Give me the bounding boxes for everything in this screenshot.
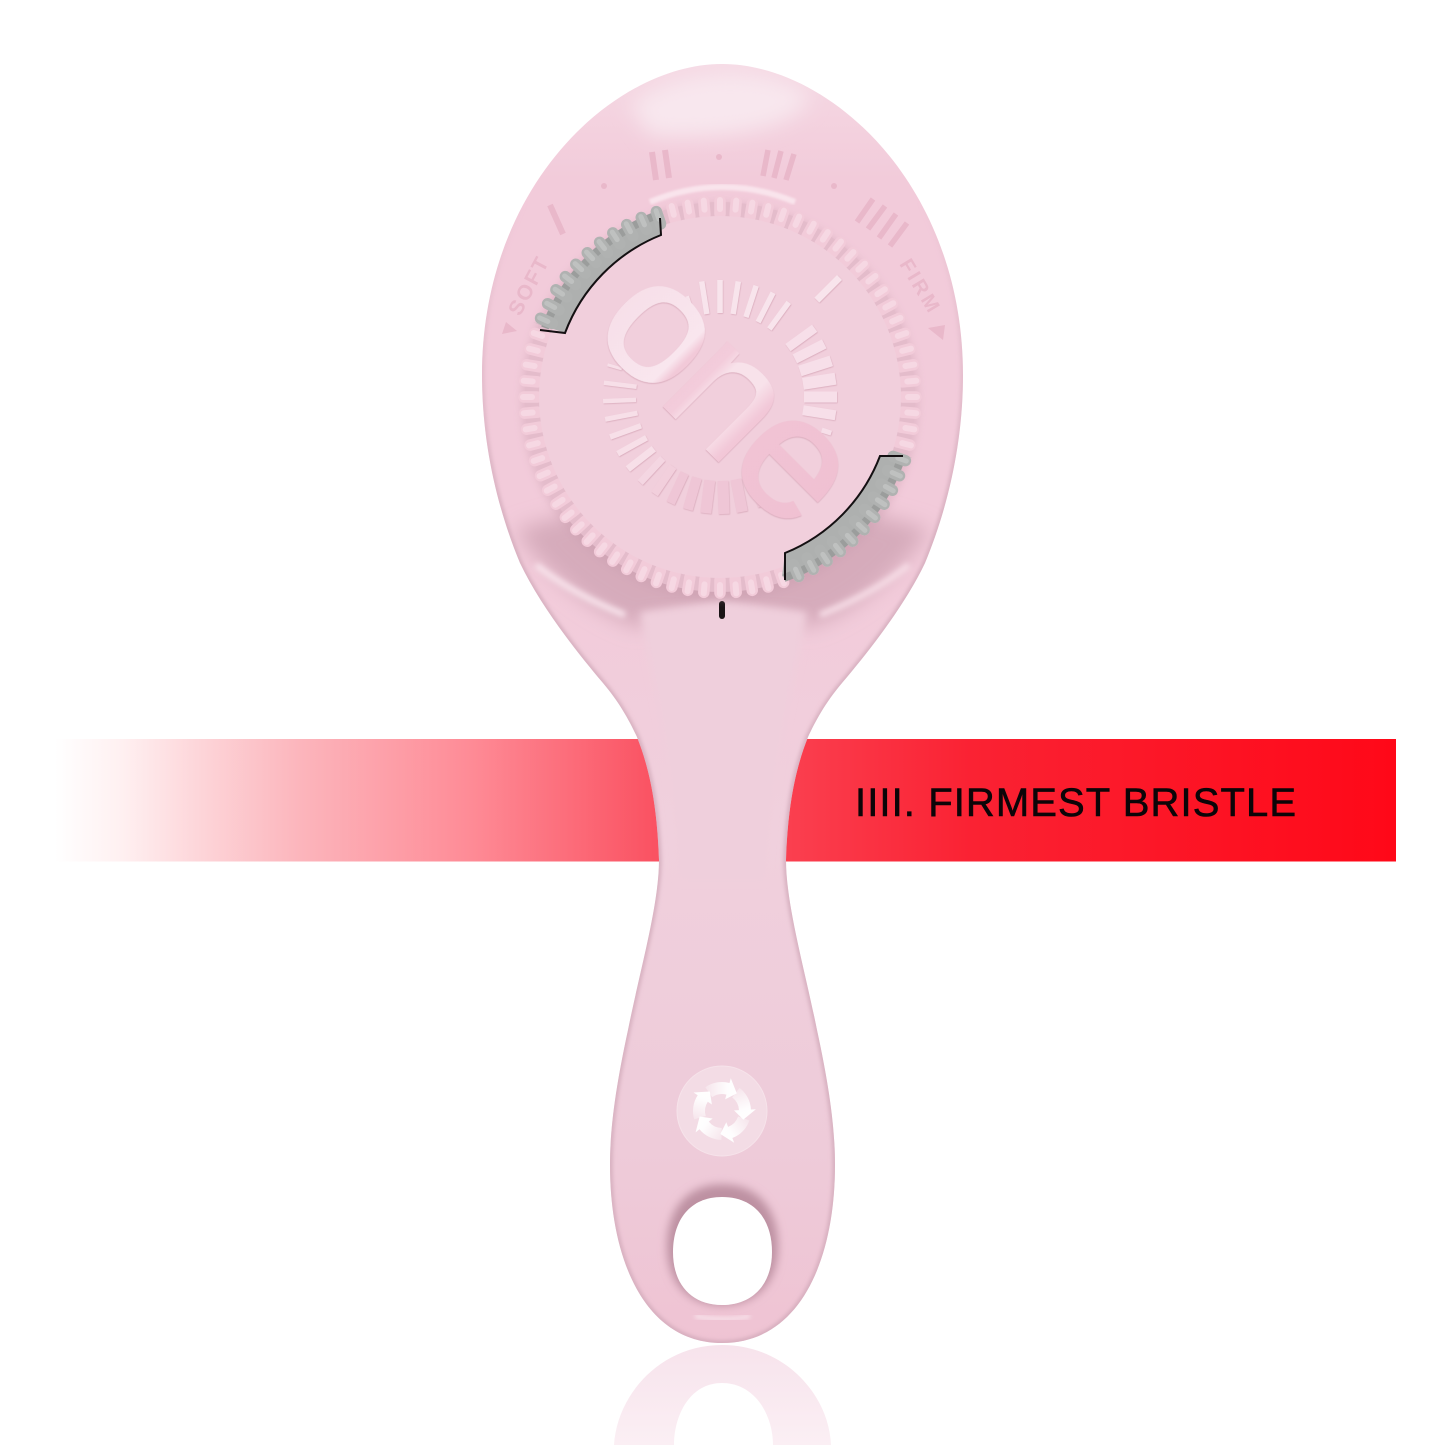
dot 3 <box>831 183 837 189</box>
indicator mark <box>719 601 725 619</box>
setting IIII <box>857 199 907 246</box>
band label: IIII. FIRMEST BRISTLE <box>855 781 1296 825</box>
hang hole <box>673 1197 772 1305</box>
ticks: bottom <box>640 458 760 514</box>
dial face <box>539 216 901 578</box>
reflection of brush handle <box>614 1345 831 1445</box>
arrow: firm <box>928 325 945 340</box>
setting II <box>652 150 669 180</box>
dial top ridge highlight <box>650 187 795 202</box>
scale markings <box>502 150 945 340</box>
ticks: top <box>687 280 789 329</box>
label: soft: SOFT <box>504 252 554 319</box>
dot 1 <box>601 183 607 189</box>
dial base <box>525 202 915 592</box>
one logo: one <box>562 223 897 558</box>
red gradient band <box>55 739 1396 862</box>
dial <box>521 187 919 600</box>
ticks: right <box>788 328 837 433</box>
label: firm: FIRM <box>895 255 945 319</box>
setting III <box>763 150 794 180</box>
knurled teeth <box>523 200 917 594</box>
brush <box>482 64 963 1343</box>
radial tick ring <box>603 277 840 514</box>
gray grip: lower right <box>782 455 912 580</box>
gray grip: upper left <box>533 211 663 333</box>
lone tick <box>817 277 840 300</box>
recycle badge <box>677 1066 767 1156</box>
arrow: soft <box>502 322 517 334</box>
setting I <box>550 205 563 234</box>
dial drop shadow <box>521 202 919 600</box>
ticks: left <box>603 365 654 469</box>
brush body <box>482 64 963 1343</box>
body shading <box>482 64 963 1343</box>
dot 2 <box>716 154 722 160</box>
